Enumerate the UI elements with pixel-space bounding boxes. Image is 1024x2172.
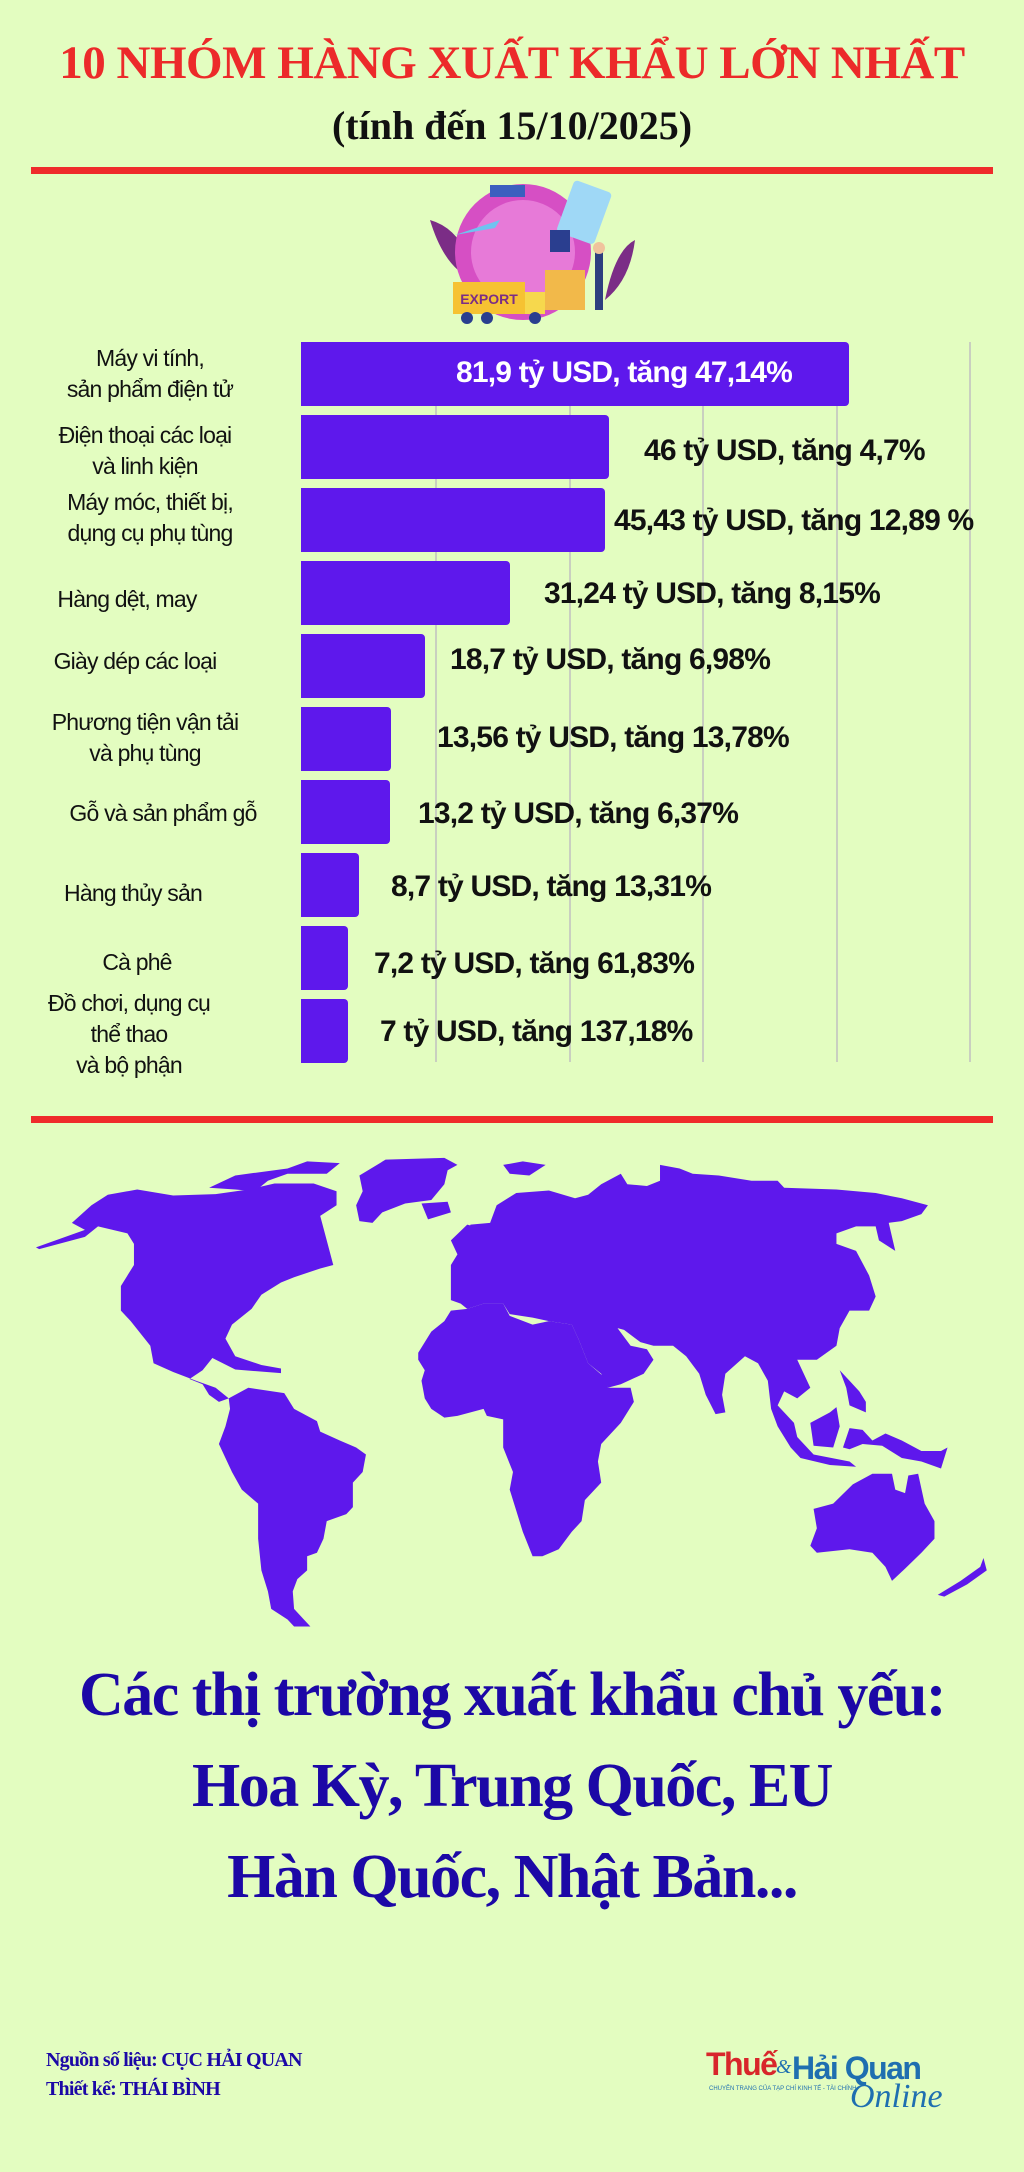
markets line 3: Hàn Quốc, Nhật Bản... (227, 1843, 797, 1911)
label 6: và phụ tùng (89, 740, 201, 766)
bar 8 (301, 853, 359, 917)
truck: EXPORT (460, 291, 518, 307)
value 4: 31,24 tỷ USD, tăng 8,15% (544, 577, 880, 610)
label 1: Máy vi tính, (96, 345, 204, 371)
logo (706, 2046, 943, 2115)
label 1: sản phẩm điện tử (67, 376, 233, 402)
title: 10 NHÓM HÀNG XUẤT KHẨU LỚN NHẤT (59, 37, 965, 89)
bar 1 (301, 342, 849, 406)
label 9: Cà phê (102, 949, 172, 975)
label 6 (52, 709, 238, 766)
bar 6 (301, 707, 391, 771)
label 2: và linh kiện (92, 453, 198, 479)
logo: Online (850, 2078, 943, 2115)
label 10: Đồ chơi, dụng cụ (48, 990, 210, 1016)
label 1 (67, 345, 234, 402)
label 7: Gỗ và sản phẩm gỗ (69, 800, 257, 826)
logo: Hải Quan (792, 2050, 920, 2086)
label 5: Giày dép các loại (54, 648, 216, 674)
value 8: 8,7 tỷ USD, tăng 13,31% (391, 870, 711, 903)
value 2: 46 tỷ USD, tăng 4,7% (644, 434, 925, 467)
label 10: và bộ phận (76, 1052, 182, 1078)
footer designer: Thiết kế: THÁI BÌNH (46, 2078, 220, 2100)
value 7: 13,2 tỷ USD, tăng 6,37% (418, 797, 738, 830)
label 10 (48, 990, 210, 1078)
value 1: 81,9 tỷ USD, tăng 47,14% (456, 356, 792, 389)
value 3: 45,43 tỷ USD, tăng 12,89 % (614, 504, 973, 537)
bar 5 (301, 634, 425, 698)
label 6: Phương tiện vận tải (52, 709, 238, 735)
value 5: 18,7 tỷ USD, tăng 6,98% (450, 643, 770, 676)
markets line 2: Hoa Kỳ, Trung Quốc, EU (192, 1752, 832, 1820)
markets heading: Các thị trường xuất khẩu chủ yếu: (79, 1661, 945, 1729)
label 3: dụng cụ phụ tùng (68, 520, 232, 546)
logo: Thuế (706, 2046, 776, 2082)
bar 7 (301, 780, 390, 844)
label 10: thể thao (91, 1021, 167, 1047)
value 10: 7 tỷ USD, tăng 137,18% (380, 1015, 693, 1048)
label 3: Máy móc, thiết bị, (67, 489, 233, 515)
bar 10 (301, 999, 348, 1063)
label 2 (58, 422, 231, 479)
label 2: Điện thoại các loại (59, 422, 231, 448)
bar 9 (301, 926, 348, 990)
label 4: Hàng dệt, may (57, 586, 197, 612)
bar chart (435, 342, 971, 1062)
logo: CHUYÊN TRANG CỦA TẠP CHÍ KINH TẾ - TÀI CHÍNH (709, 2086, 856, 2092)
bar 2 (301, 415, 609, 479)
world map (36, 1158, 987, 1626)
value 9: 7,2 tỷ USD, tăng 61,83% (374, 947, 694, 980)
icon: export illustration (430, 180, 635, 324)
label 8: Hàng thủy sản (64, 880, 202, 906)
value 6: 13,56 tỷ USD, tăng 13,78% (437, 721, 789, 754)
truck (453, 282, 545, 324)
bar 3 (301, 488, 605, 552)
bar 4 (301, 561, 510, 625)
footer source: Nguồn số liệu: CỤC HẢI QUAN (46, 2049, 302, 2071)
subtitle: (tính đến 15/10/2025) (332, 103, 692, 148)
logo: & (776, 2056, 792, 2078)
label 3 (67, 489, 233, 546)
